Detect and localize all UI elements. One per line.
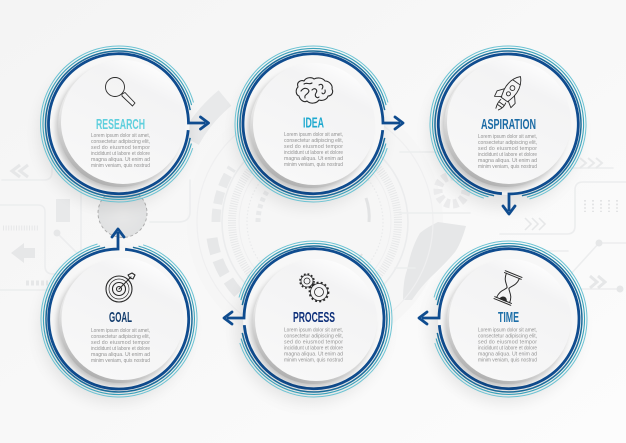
icon: rocket (489, 70, 529, 116)
heading: research: RESEARCH (96, 116, 145, 133)
text block: research: consectetur adipiscing elit, (91, 139, 150, 145)
text block: aspiration (478, 134, 537, 170)
text block: research: incididunt ut labore et dolore (91, 151, 150, 157)
icon: target (106, 273, 135, 302)
text block: process: incididunt ut labore et dolore (284, 346, 343, 352)
text block: time: minim veniam, quis nostrud (478, 358, 537, 364)
text block: aspiration: incididunt ut labore et dolore (478, 152, 537, 158)
text block: research (91, 133, 150, 169)
text block: idea (284, 132, 343, 168)
panel: process (224, 241, 392, 402)
text block: process: consectetur adipiscing elit, (284, 334, 343, 340)
text block: time (478, 328, 537, 364)
text block: idea: incididunt ut labore et dolore (284, 150, 343, 156)
text block: aspiration: magna aliqua. Ut enim ad (478, 158, 537, 164)
icon: magnifier (106, 78, 135, 106)
text block: process: sed do eiusmod tempor (284, 340, 343, 346)
text block: idea: magna aliqua. Ut enim ad (284, 156, 343, 162)
text block: goal: incididunt ut labore et dolore (91, 346, 150, 352)
text block: process: minim veniam, quis nostrud (284, 358, 343, 364)
text block: time: Lorem ipsum dolor sit amet, (478, 328, 537, 334)
text block: time: incididunt ut labore et dolore (478, 346, 537, 352)
text block: aspiration: consectetur adipiscing elit, (478, 140, 537, 146)
text block: aspiration: sed do eiusmod tempor (478, 146, 537, 152)
text block: process (284, 328, 343, 364)
icon: brain (296, 78, 333, 103)
text block: research: Lorem ipsum dolor sit amet, (91, 133, 150, 139)
text block: idea: consectetur adipiscing elit, (284, 138, 343, 144)
text block: time: consectetur adipiscing elit, (478, 334, 537, 340)
text block: goal: magna aliqua. Ut enim ad (91, 352, 150, 358)
circuit background: left traces (0, 160, 190, 290)
heading: idea: IDEA (303, 114, 324, 132)
text block: aspiration: Lorem ipsum dolor sit amet, (478, 134, 537, 140)
circuit background: central dial (187, 94, 466, 350)
panel: idea (235, 46, 403, 207)
text block: research: minim veniam, quis nostrud (91, 163, 150, 169)
text block: goal: sed do eiusmod tempor (91, 340, 150, 346)
circuit background: right traces (395, 152, 626, 292)
text block: time: sed do eiusmod tempor (478, 340, 537, 346)
text block: idea: sed do eiusmod tempor (284, 144, 343, 150)
text block: process: Lorem ipsum dolor sit amet, (284, 328, 343, 334)
text block: goal: Lorem ipsum dolor sit amet, (91, 328, 150, 334)
text block: research: sed do eiusmod tempor (91, 145, 150, 151)
text block: idea: minim veniam, quis nostrud (284, 162, 343, 168)
text block: time: magna aliqua. Ut enim ad (478, 352, 537, 358)
text block: goal: minim veniam, quis nostrud (91, 358, 150, 364)
text block: idea: Lorem ipsum dolor sit amet, (284, 132, 343, 138)
heading: aspiration: ASPIRATION (481, 116, 536, 133)
text block: goal (91, 328, 150, 364)
panel: aspiration (430, 46, 586, 214)
text block: research: magna aliqua. Ut enim ad (91, 157, 150, 163)
text block: goal: consectetur adipiscing elit, (91, 334, 150, 340)
icon: gears (300, 274, 328, 302)
heading: time: TIME (498, 309, 519, 326)
panel: time (419, 241, 587, 402)
text block: aspiration: minim veniam, quis nostrud (478, 164, 537, 170)
panel: goal (41, 229, 197, 402)
heading: process: PROCESS (293, 309, 335, 326)
panel: research (40, 46, 208, 207)
dashed connector circle (98, 188, 147, 238)
text block: process: magna aliqua. Ut enim ad (284, 352, 343, 358)
icon: hourglass (494, 271, 522, 305)
heading: goal: GOAL (109, 309, 132, 326)
